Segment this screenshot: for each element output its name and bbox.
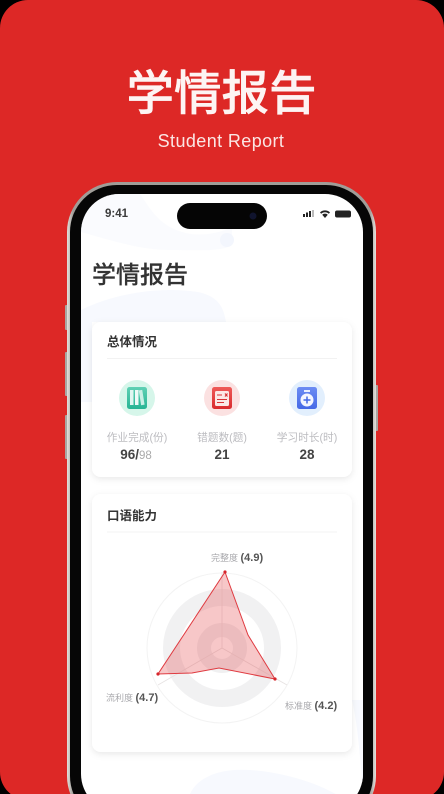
radar label: accuracy: 标准度 (4.2) xyxy=(285,700,337,712)
status icons xyxy=(303,210,351,218)
status bar time: 9:41 xyxy=(105,208,129,220)
value: homework completed: 96/98 xyxy=(120,447,152,462)
phone mockup xyxy=(65,182,378,794)
phone frame xyxy=(67,182,376,794)
panel: overall summary xyxy=(92,322,352,477)
icon: study timer xyxy=(289,380,325,416)
label: wrong answers: 错题数(题) xyxy=(197,431,247,444)
background blobs xyxy=(81,194,363,794)
main title: 学情报告 xyxy=(126,68,316,121)
data polygon xyxy=(158,572,275,679)
label: study time: 学习时长(时) xyxy=(277,431,337,444)
radar label: completeness: 完整度 (4.9) xyxy=(211,552,263,564)
icon: homework books xyxy=(119,380,155,416)
value: study time: 28 xyxy=(299,447,315,462)
dynamic island xyxy=(177,203,267,229)
side buttons xyxy=(65,305,378,459)
icon: wrong answers xyxy=(204,380,240,416)
subtitle: Student Report xyxy=(158,131,284,151)
phone screen xyxy=(81,194,363,794)
panel: speaking ability xyxy=(92,494,352,752)
panel heading: 口语能力 xyxy=(107,508,157,523)
label: homework completed: 作业完成(份) xyxy=(107,431,167,444)
panel heading: 总体情况 xyxy=(107,334,158,349)
value: wrong answers: 21 xyxy=(214,447,230,462)
radar chart xyxy=(147,570,297,723)
radar label: fluency: 流利度 (4.7) xyxy=(106,692,158,704)
screen heading: 学情报告 xyxy=(92,262,188,289)
